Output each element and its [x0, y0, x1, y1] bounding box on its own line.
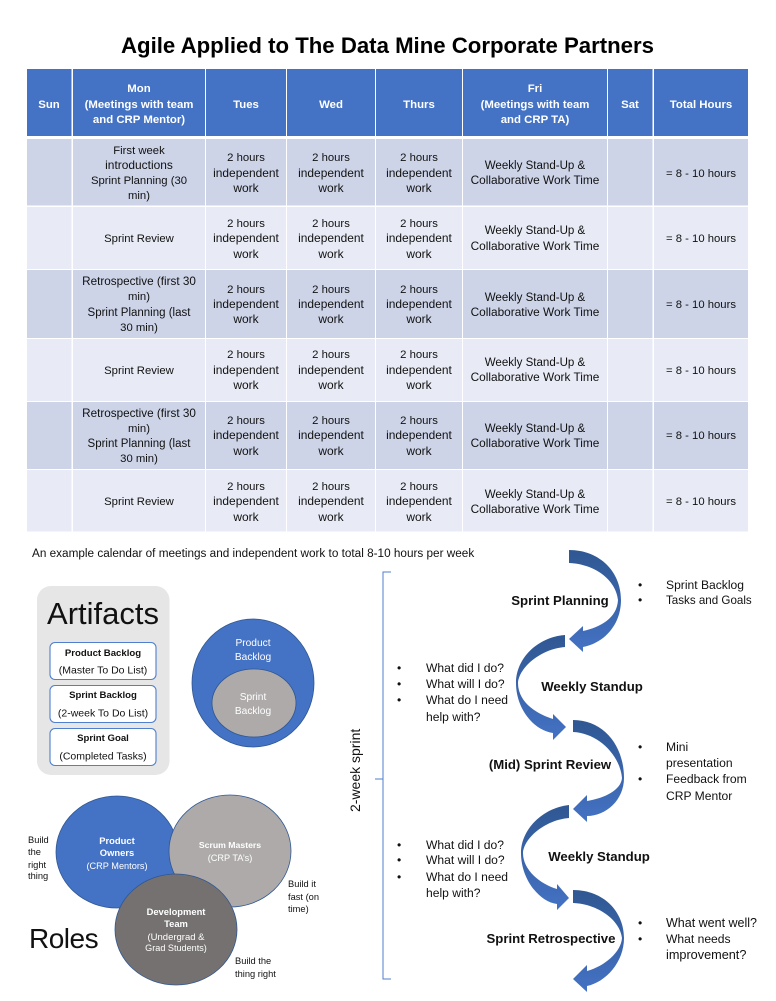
table row 1: 2 hours: [400, 152, 438, 164]
notes: sprint retrospective: [638, 916, 757, 962]
role note: development team: thing right: [235, 969, 276, 979]
role: development team: (Undergrad &: [147, 932, 205, 943]
notes: standup 1: What did I do?: [426, 661, 504, 675]
table row 4: 2 hours: [227, 349, 265, 361]
table row 1: introductions: [105, 158, 173, 172]
step label: mid sprint review: (Mid) Sprint Review: [489, 757, 612, 772]
table row 3: independent: [386, 297, 453, 311]
table row 5: independent: [386, 428, 453, 442]
table header row: (Meetings with team: [85, 99, 193, 111]
table row 6: Weekly Stand-Up &: [485, 489, 586, 501]
table row 6: independent: [213, 494, 280, 508]
panel: artifacts: [37, 586, 170, 775]
role note: product owners: the: [28, 847, 41, 857]
table row 3: min): [128, 291, 150, 303]
table row 2: independent: [298, 231, 365, 245]
calendar table: [27, 69, 748, 532]
role: product owners: [56, 796, 178, 908]
nested backlog diagram: Sprint: [240, 692, 266, 703]
table row 1: Collaborative Work Time: [471, 173, 600, 187]
artifact: sprint backlog: [50, 686, 156, 722]
arrow: sprint retrospective: [573, 890, 624, 992]
table row 3: Retrospective (first 30: [82, 275, 196, 288]
notes: sprint retrospective: •: [638, 932, 642, 946]
table row 4: independent: [298, 363, 365, 377]
table row 2: 2 hours: [312, 218, 350, 230]
step label: weekly standup 2: Weekly Standup: [548, 849, 650, 864]
table row 5: min): [128, 423, 150, 435]
table row 2: = 8 - 10 hours: [666, 233, 736, 245]
table row 2: work: [405, 247, 432, 261]
table row 3: Weekly Stand-Up &: [485, 292, 586, 304]
arrow: sprint planning: [569, 550, 621, 652]
notes: standup 2: What do I need: [426, 870, 508, 884]
table row 3: = 8 - 10 hours: [666, 299, 736, 311]
artifacts heading: Artifacts: [47, 596, 159, 631]
table row 2: Sprint Review: [104, 233, 175, 245]
table row 1: min): [128, 190, 150, 202]
notes: standup 1: What do I need: [426, 693, 508, 707]
artifact: sprint goal: Sprint Goal: [77, 733, 129, 744]
table row 5: 2 hours: [400, 415, 438, 427]
table row 6: 2 hours: [227, 481, 265, 493]
table row 4: Weekly Stand-Up &: [485, 357, 586, 369]
role: product owners: (CRP Mentors): [86, 861, 148, 871]
table row 4: work: [317, 378, 344, 392]
table row 5: 30 min): [120, 453, 158, 465]
table header row: and CRP TA): [501, 114, 569, 126]
nested backlog diagram: Backlog: [235, 652, 271, 663]
notes: mid sprint review: •: [638, 740, 642, 754]
notes: standup 1: help with?: [426, 710, 481, 724]
table row 6: independent: [386, 494, 453, 508]
title: Agile Applied to The Data Mine Corporate Partners: [121, 33, 654, 58]
notes: standup 1: [397, 661, 508, 724]
table row 1: work: [405, 181, 432, 195]
nested backlog diagram: Product: [235, 638, 271, 649]
table header row: (Meetings with team: [481, 99, 589, 111]
role: scrum masters: Scrum Masters: [199, 840, 261, 850]
notes: sprint planning: [638, 578, 752, 607]
notes: standup 1: What will I do?: [426, 677, 505, 691]
table row 4: independent: [213, 363, 280, 377]
table header row: Total Hours: [670, 99, 732, 111]
step label: sprint retrospective: Sprint Retrospective: [487, 931, 615, 946]
table row 5: Collaborative Work Time: [471, 436, 600, 450]
table row 4: independent: [386, 363, 453, 377]
table header row: Tues: [233, 99, 259, 111]
artifact: sprint backlog: Sprint Backlog: [69, 690, 137, 701]
table row 6: = 8 - 10 hours: [666, 496, 736, 508]
roles venn diagram: [56, 795, 291, 985]
notes: sprint retrospective: •: [638, 916, 642, 930]
table row 5: work: [405, 444, 432, 458]
table header row: and CRP Mentor): [93, 114, 185, 126]
table row 1: 2 hours: [227, 152, 265, 164]
table row 3: 2 hours: [400, 284, 438, 296]
table row 4: work: [405, 378, 432, 392]
table row 5: [27, 402, 748, 469]
roles heading: Roles: [29, 923, 98, 954]
table row 3: work: [317, 312, 344, 326]
table row 5: 2 hours: [227, 415, 265, 427]
notes: standup 2: What did I do?: [426, 838, 504, 852]
notes: sprint planning: Sprint Backlog: [666, 578, 744, 592]
table header row: Sat: [621, 99, 639, 111]
table header row: Sun: [38, 99, 60, 111]
table row 5: independent: [213, 428, 280, 442]
notes: sprint retrospective: What needs: [666, 932, 731, 946]
table row 3: independent: [213, 297, 280, 311]
notes: standup 2: What will I do?: [426, 853, 505, 867]
step label: weekly standup 1: Weekly Standup: [541, 679, 643, 694]
notes: mid sprint review: presentation: [666, 756, 733, 770]
table row 1: independent: [298, 166, 365, 180]
notes: mid sprint review: •: [638, 772, 642, 786]
table row 3: 2 hours: [227, 284, 265, 296]
role note: scrum masters: Build it: [288, 879, 316, 889]
table row 2: independent: [386, 231, 453, 245]
bracket: 2-week sprint: 2-week sprint: [347, 729, 363, 812]
role note: development team: [235, 956, 276, 979]
notes: mid sprint review: Mini: [666, 740, 688, 754]
table row 1: Weekly Stand-Up &: [485, 160, 586, 172]
role note: product owners: thing: [28, 871, 48, 881]
notes: mid sprint review: Feedback from: [666, 772, 747, 786]
table row 6: work: [405, 510, 432, 524]
table row 1: independent: [386, 166, 453, 180]
table row 3: work: [405, 312, 432, 326]
table row 3: independent: [298, 297, 365, 311]
notes: sprint planning: •: [638, 578, 642, 592]
bracket: 2-week sprint: [347, 572, 391, 979]
role note: scrum masters: fast (on: [288, 892, 319, 902]
table row 5: Weekly Stand-Up &: [485, 423, 586, 435]
table row 5: 2 hours: [312, 415, 350, 427]
arrow: weekly standup 1: [516, 635, 566, 740]
table row 3: work: [232, 312, 259, 326]
notes: standup 2: •: [397, 853, 401, 867]
table header row: [27, 69, 748, 136]
nested backlog diagram: [192, 619, 314, 747]
table row 1: = 8 - 10 hours: [666, 168, 736, 180]
table row 2: Collaborative Work Time: [471, 239, 600, 253]
artifact: product backlog: [50, 642, 156, 680]
table row 3: 30 min): [120, 322, 158, 334]
notes: standup 1: •: [397, 677, 401, 691]
table row 5: work: [232, 444, 259, 458]
table row 2: Weekly Stand-Up &: [485, 225, 586, 237]
notes: standup 1: •: [397, 693, 401, 707]
table row 2: work: [317, 247, 344, 261]
role: product owners: Owners: [100, 847, 134, 858]
table row 2: [27, 207, 748, 269]
table row 5: work: [317, 444, 344, 458]
table header row: Thurs: [403, 99, 435, 111]
role note: product owners: right: [28, 860, 47, 870]
table row 1: [27, 139, 748, 206]
table row 5: Sprint Planning (last: [88, 438, 191, 450]
role note: development team: Build the: [235, 956, 271, 966]
table row 1: independent: [213, 166, 280, 180]
table row 3: 2 hours: [312, 284, 350, 296]
table row 4: work: [232, 378, 259, 392]
arrow: mid sprint review: [573, 720, 624, 822]
table row 2: independent: [213, 231, 280, 245]
table row 5: = 8 - 10 hours: [666, 430, 736, 442]
arrow: weekly standup 2: [521, 805, 569, 910]
notes: sprint planning: •: [638, 593, 642, 607]
role note: product owners: [28, 835, 49, 881]
notes: standup 2: [397, 838, 508, 900]
role: development team: Grad Students): [145, 943, 207, 953]
table row 2: 2 hours: [400, 218, 438, 230]
table row 1: work: [317, 181, 344, 195]
table row 6: Sprint Review: [104, 496, 175, 508]
table row 6: work: [317, 510, 344, 524]
notes: sprint retrospective: What went well?: [666, 916, 757, 930]
notes: standup 2: help with?: [426, 886, 481, 900]
table caption: An example calendar of meetings and independent work to total 8-10 hours per week: [32, 547, 474, 560]
table row 6: 2 hours: [312, 481, 350, 493]
artifact: product backlog: Product Backlog: [65, 648, 141, 659]
notes: sprint planning: Tasks and Goals: [666, 594, 752, 607]
table row 5: independent: [298, 428, 365, 442]
table row 4: [27, 339, 748, 401]
table header row: Wed: [319, 99, 343, 111]
role note: scrum masters: [288, 879, 319, 914]
table header row: Mon: [127, 83, 151, 95]
table row 6: 2 hours: [400, 481, 438, 493]
role note: product owners: Build: [28, 835, 49, 845]
table row 2: 2 hours: [227, 218, 265, 230]
table row 3: [27, 270, 748, 338]
table row 4: Sprint Review: [104, 365, 175, 377]
table row 1: work: [232, 181, 259, 195]
role note: scrum masters: time): [288, 904, 309, 914]
artifact: sprint goal: [50, 728, 156, 766]
nested backlog diagram: Backlog: [235, 706, 271, 717]
table header row: Fri: [528, 83, 542, 95]
artifact: sprint goal: (Completed Tasks): [59, 750, 147, 762]
notes: sprint retrospective: improvement?: [666, 948, 746, 962]
notes: mid sprint review: CRP Mentor: [666, 789, 732, 803]
notes: mid sprint review: [638, 740, 747, 803]
table row 6: Collaborative Work Time: [471, 502, 600, 516]
table row 6: [27, 470, 748, 532]
table row 6: work: [232, 510, 259, 524]
role: scrum masters: (CRP TA’s): [208, 853, 252, 863]
table row 6: independent: [298, 494, 365, 508]
step label: sprint planning: Sprint Planning: [511, 593, 609, 608]
table row 4: 2 hours: [312, 349, 350, 361]
artifact: sprint backlog: (2-week To Do List): [58, 708, 148, 720]
role: scrum masters: [169, 795, 291, 907]
table row 4: = 8 - 10 hours: [666, 365, 736, 377]
table row 1: 2 hours: [312, 152, 350, 164]
table row 5: Retrospective (first 30: [82, 407, 196, 420]
role: product owners: Product: [99, 835, 135, 846]
table row 3: Sprint Planning (last: [88, 307, 191, 319]
notes: standup 1: •: [397, 661, 401, 675]
table row 3: Collaborative Work Time: [471, 305, 600, 319]
notes: standup 2: •: [397, 838, 401, 852]
notes: standup 2: •: [397, 870, 401, 884]
table row 1: Sprint Planning (30: [91, 175, 187, 187]
role: development team: [115, 874, 237, 985]
table row 4: Collaborative Work Time: [471, 370, 600, 384]
table row 2: work: [232, 247, 259, 261]
table row 4: 2 hours: [400, 349, 438, 361]
role: development team: Team: [164, 918, 188, 929]
table row 1: First week: [113, 145, 165, 157]
role: development team: Development: [147, 906, 205, 917]
artifact: product backlog: (Master To Do List): [59, 664, 147, 676]
